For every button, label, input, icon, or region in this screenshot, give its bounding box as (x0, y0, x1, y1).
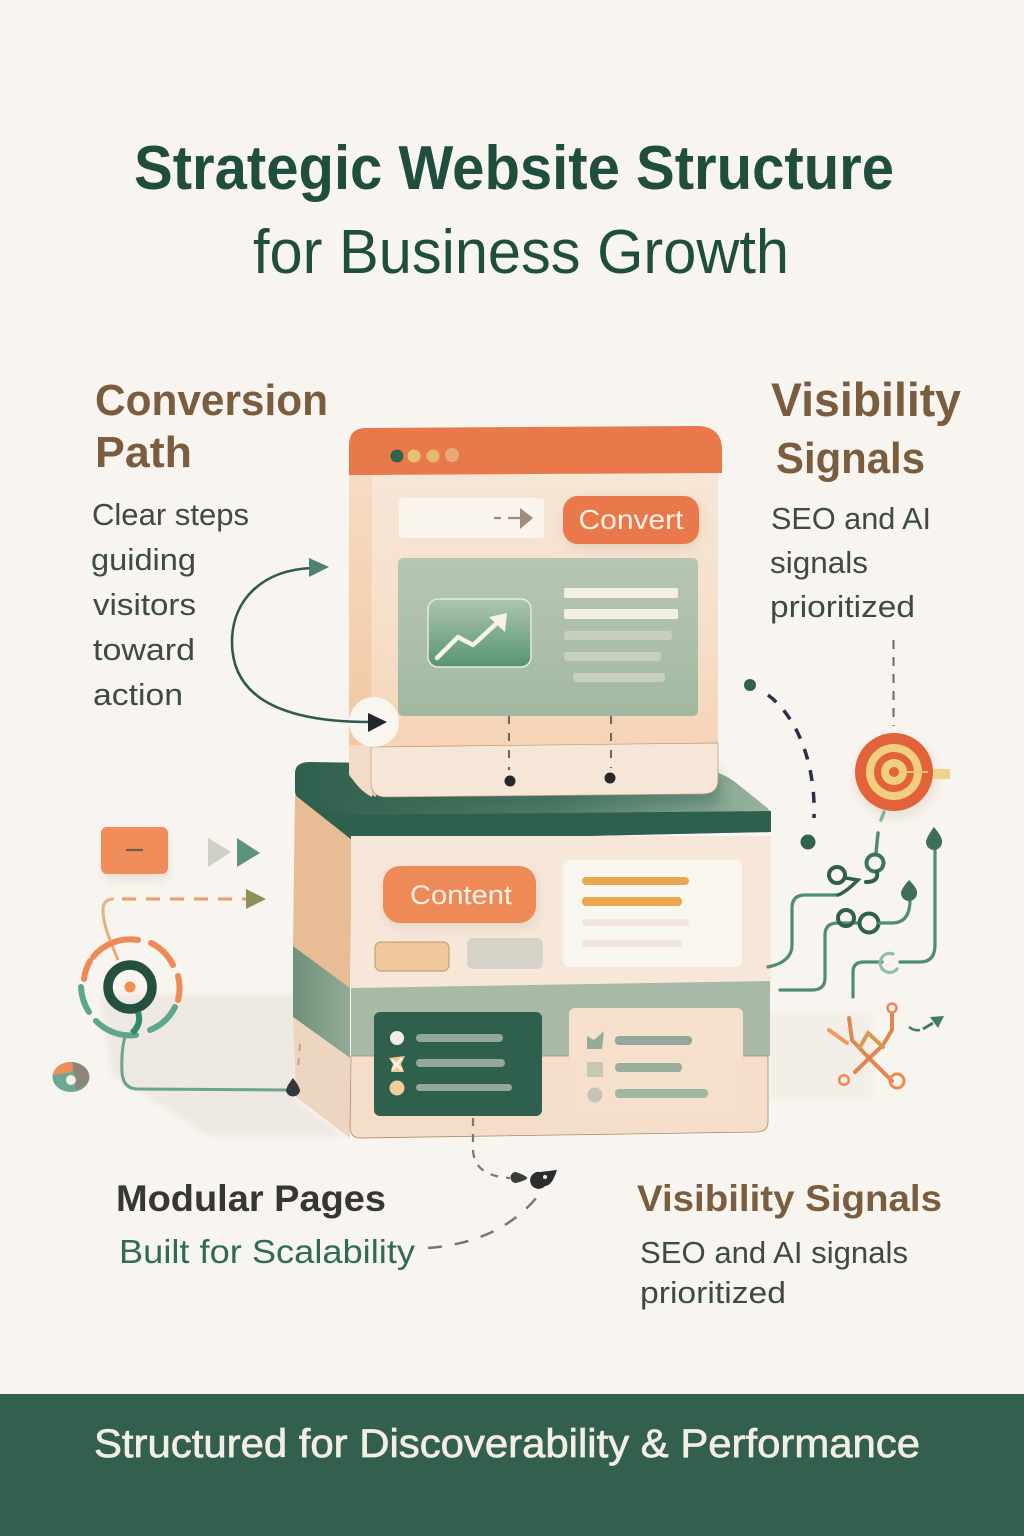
box front base (350, 1056, 768, 1138)
icon: small pie (52, 1062, 90, 1092)
callout: visibility signals bottom (637, 1178, 942, 1310)
callout: visibility signals top: prioritized (770, 589, 915, 624)
window body (371, 473, 718, 797)
callout: conversion path: Conversion (95, 376, 328, 425)
callout: visibility signals bottom: Visibility Signals (637, 1178, 942, 1219)
address bar (399, 498, 544, 538)
box front face cream (351, 836, 771, 989)
icon: drop head mid (901, 880, 917, 901)
callout: conversion path: Path (95, 428, 192, 477)
icon: orange crossed path (829, 1004, 904, 1088)
connector: bottom dashed (428, 1118, 557, 1248)
panel text lines (564, 588, 678, 682)
callout: modular pages: Modular Pages (116, 1178, 386, 1219)
circuit lines (768, 812, 935, 997)
callout: conversion path (91, 376, 328, 712)
small tan tile (375, 942, 449, 971)
callout: modular pages: Built for Scalability (119, 1233, 416, 1270)
box front edge strip (297, 795, 771, 841)
callout: visibility signals bottom: SEO and AI signals (640, 1235, 908, 1270)
lower box module (293, 762, 771, 1138)
icon: target rings (81, 939, 180, 1035)
callout: visibility signals top (770, 373, 961, 624)
arrow: dashed orange (103, 889, 266, 960)
icon: play triangles (208, 838, 260, 867)
callout: visibility signals top: SEO and AI (771, 501, 931, 536)
window base band (371, 743, 718, 797)
window header (349, 426, 722, 475)
callout: conversion path: action (93, 677, 183, 712)
convert button: Convert (578, 504, 684, 535)
icon: drop head tall (926, 827, 942, 850)
box left green band (293, 946, 350, 1058)
icon: bullseye target (855, 733, 950, 818)
callout: visibility signals top: Signals (776, 434, 925, 483)
connector: green line (122, 1037, 287, 1090)
callout: conversion path: visitors (93, 587, 196, 622)
callout: conversion path: toward (93, 632, 195, 667)
box left base (293, 1017, 350, 1138)
box top plate (295, 762, 771, 841)
dark list card (374, 1012, 542, 1116)
light checklist card (569, 1008, 743, 1119)
callout: modular pages (116, 1178, 416, 1270)
icon: orange minus tile (101, 827, 168, 880)
window left side (349, 470, 376, 797)
green panel (398, 558, 698, 716)
window shadow (360, 770, 720, 806)
title: Strategic Website Structure (134, 134, 894, 203)
dashed navy curve (744, 679, 816, 850)
callout: conversion path: guiding (91, 542, 196, 577)
window left base (349, 745, 372, 797)
ground shadows (100, 994, 873, 1136)
convert button (563, 496, 699, 548)
footer band: Structured for Discoverability & Performance (94, 1422, 920, 1466)
icon: drop (286, 1078, 300, 1097)
white text card (563, 860, 742, 967)
arrow: small green (909, 1016, 944, 1030)
box side tick marks (298, 1044, 300, 1068)
title: for Business Growth (253, 218, 789, 287)
connector dashes and dots (504, 716, 616, 786)
right: dashed signals (744, 640, 950, 1088)
box front band green (351, 981, 770, 1056)
box left side (293, 795, 352, 988)
content button: Content (410, 880, 513, 910)
left: flow icons (52, 827, 300, 1097)
chart icon (428, 599, 531, 667)
small grey tile (467, 938, 543, 969)
callout: conversion path: Clear steps (92, 497, 249, 532)
title (134, 134, 894, 287)
content button (383, 866, 537, 927)
callout: visibility signals top: Visibility (771, 373, 961, 426)
callout: visibility signals bottom: prioritized (640, 1275, 786, 1310)
footer band (0, 1394, 1024, 1536)
top browser window (349, 426, 722, 806)
callout: visibility signals top: signals (770, 545, 868, 580)
header dots (390, 448, 459, 462)
arrow: conversion loop (232, 558, 399, 747)
dashed vertical (892, 640, 894, 726)
